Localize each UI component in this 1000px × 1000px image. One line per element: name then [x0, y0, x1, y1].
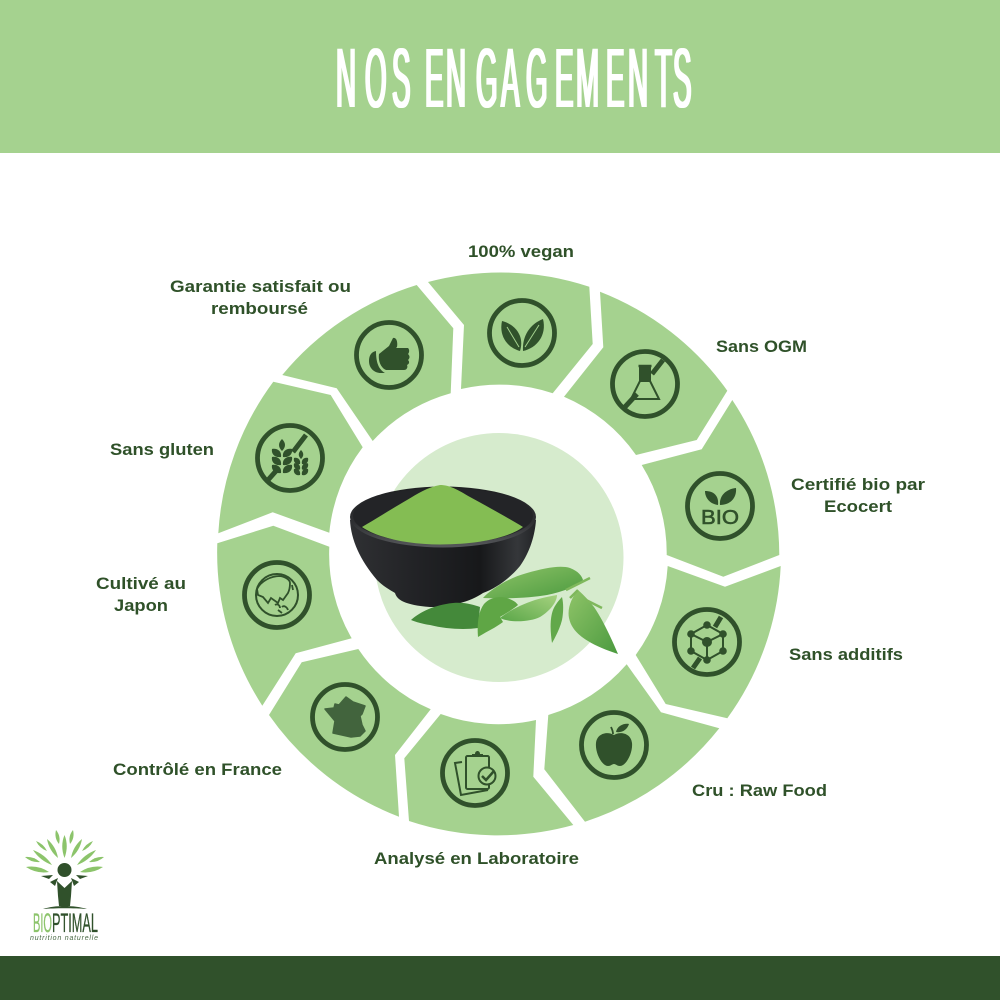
segment: garantie satisfait [282, 285, 453, 441]
label: cru raw food: Cru : Raw Food [692, 781, 827, 800]
ring of ten segments [217, 272, 781, 835]
bowl inner wall [353, 488, 533, 544]
label: cultivé au Japon: Japon [114, 596, 168, 615]
icon: globe showing Asia (Japon) [244, 562, 310, 628]
label: certifié bio par Ecocert: Certifié bio par [791, 475, 925, 494]
bowl rim [350, 486, 536, 548]
label: cultivé au Japon: Cultivé au [96, 574, 186, 593]
label: certifié bio par Ecocert [791, 475, 925, 516]
segment: cultivé au Japon [217, 526, 352, 706]
powder mound [362, 485, 523, 544]
logo: Bioptimal: PTIMAL [52, 908, 98, 938]
icon: two leaves (vegan) [490, 300, 554, 366]
BIO word: BIO [701, 506, 739, 529]
icon: map of France [312, 684, 378, 750]
segment: analysé en laboratoire [404, 714, 573, 835]
leaf: large right [569, 590, 618, 654]
segment: certifié bio [642, 400, 779, 577]
bowl of green powder with leaves [350, 485, 618, 654]
leaf: middle [478, 597, 518, 637]
segment: 100% vegan [428, 272, 593, 393]
label: sans OGM: Sans OGM [716, 337, 807, 356]
label: cultivé au Japon [96, 574, 186, 615]
label: contrôlé en France: Contrôlé en France [113, 760, 282, 779]
leaf: lower left [411, 603, 480, 629]
segment: cru raw food [544, 664, 719, 822]
icon: crossed-out flask (sans OGM) [612, 352, 678, 416]
footer band [0, 956, 1000, 1000]
logo: Bioptimal [25, 830, 104, 942]
labels [96, 242, 925, 868]
icon: BIO badge [688, 474, 752, 538]
label: certifié bio par Ecocert: Ecocert [824, 497, 892, 516]
stem [566, 578, 602, 608]
header band [0, 0, 1000, 153]
bowl body [350, 520, 536, 607]
label: garantie satisfait ou remboursé [170, 277, 351, 318]
logo figure [41, 863, 88, 909]
logo tree leaves [25, 830, 104, 872]
label: sans additifs: Sans additifs [789, 645, 903, 664]
label: analysé en laboratoire: Analysé en Laboratoire [374, 849, 579, 868]
segment: sans OGM [564, 292, 727, 455]
icon: apple [582, 712, 646, 778]
center light circle [374, 433, 624, 682]
icon: crossed-out molecule (sans additifs) [674, 610, 740, 674]
icon: checked clipboards (analysé) [442, 740, 508, 806]
label: garantie satisfait ou remboursé: remboursé [211, 299, 308, 318]
segment: sans gluten [218, 382, 363, 533]
label: sans gluten: Sans gluten [110, 440, 214, 459]
segment: sans additifs [636, 566, 781, 718]
segment: contrôlé en France [269, 649, 431, 817]
title: NOS ENGAGEMENTS [336, 32, 691, 126]
icon: crossed-out wheat (sans gluten) [258, 426, 322, 490]
logo wordmark: BIO [33, 908, 52, 938]
leaf: upper long [483, 567, 583, 598]
label: 100% vegan: 100% vegan [468, 242, 574, 261]
label: garantie satisfait ou remboursé: Garantie satisfait ou [170, 277, 351, 296]
leaf: middle right [500, 595, 557, 621]
leaf: small hanging [551, 597, 563, 643]
logo tagline: nutrition naturelle [30, 935, 98, 942]
icon: thumbs up (garantie) [356, 322, 422, 388]
